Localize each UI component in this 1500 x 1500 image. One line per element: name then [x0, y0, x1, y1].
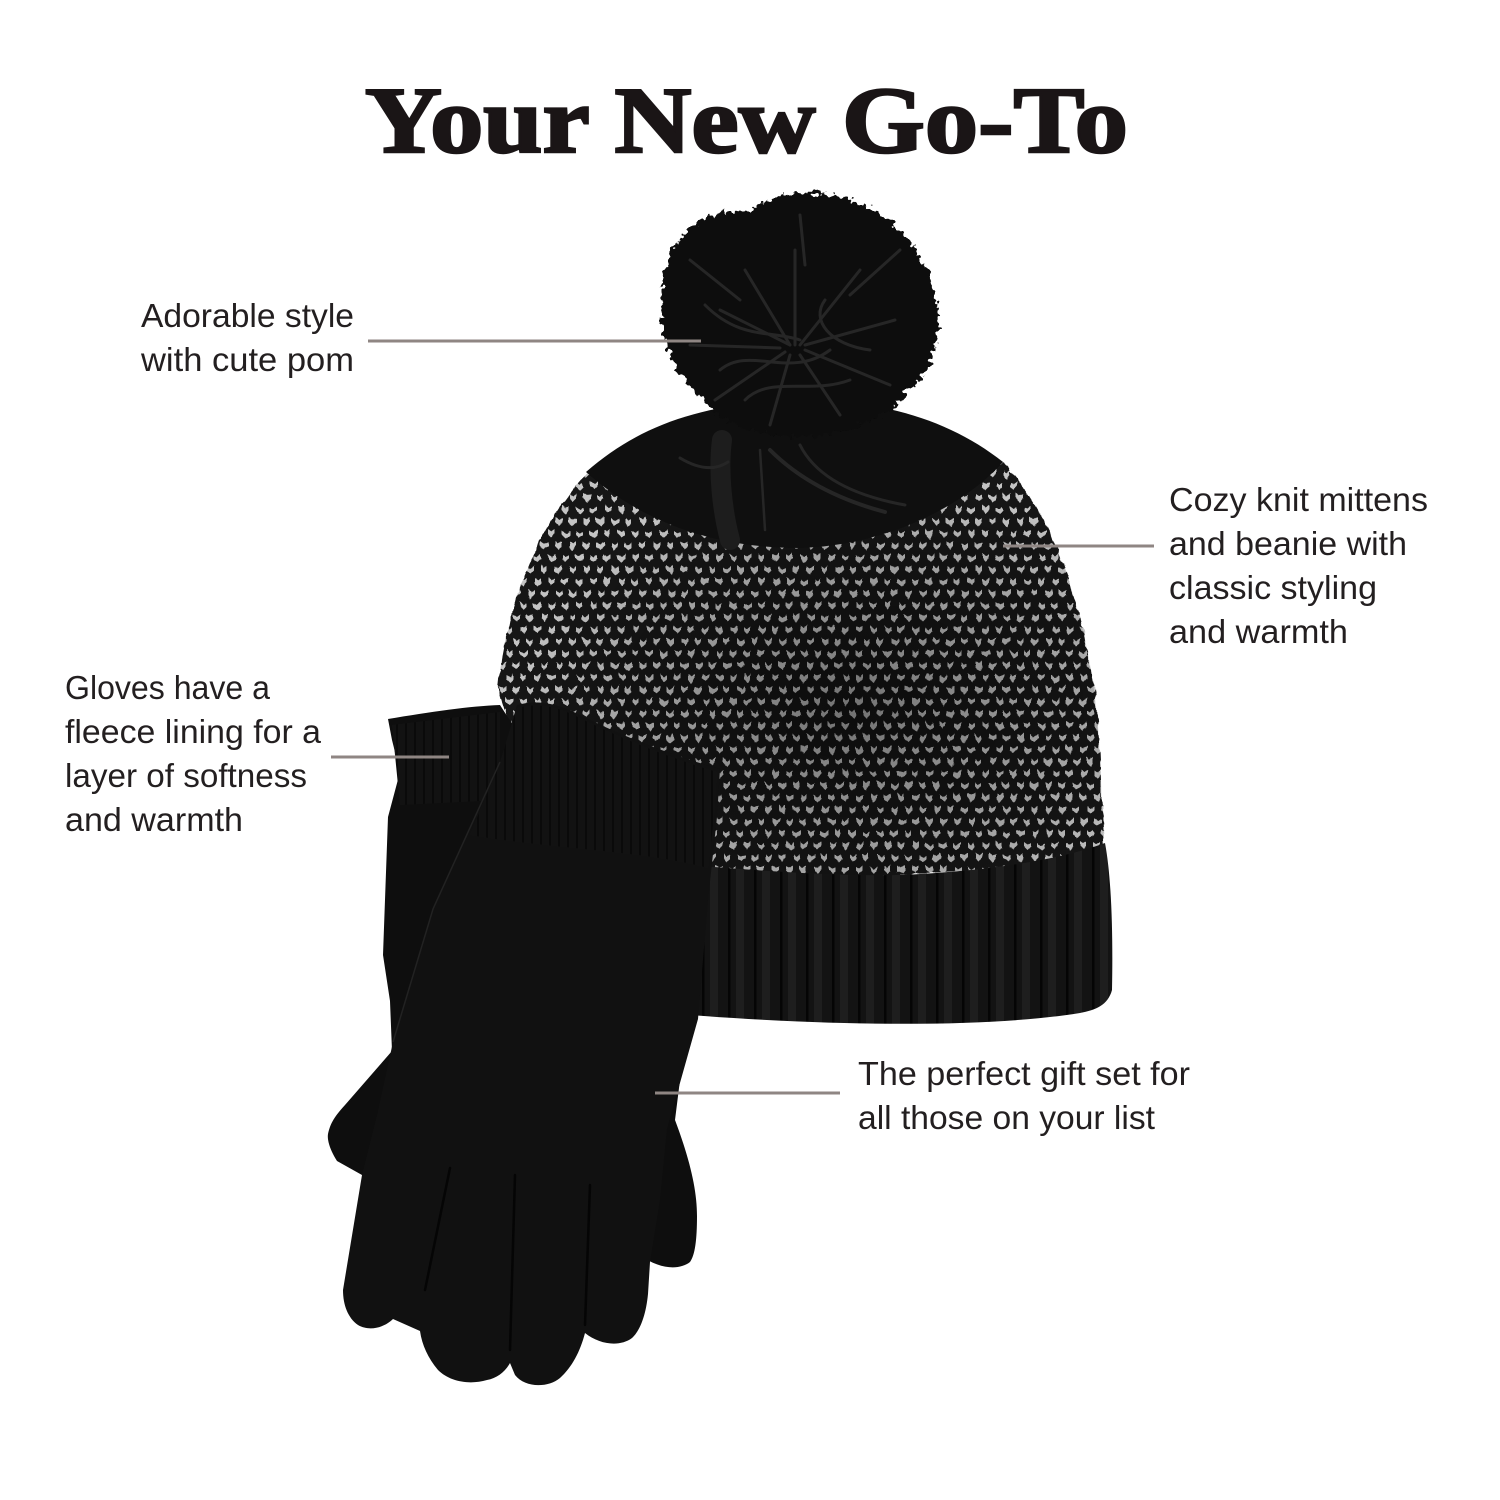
callout text: knit: and warmth	[1169, 613, 1348, 650]
leader line: knit	[1003, 544, 1154, 548]
beanie patterned body	[498, 460, 1105, 890]
callout text: knit: classic styling	[1169, 569, 1377, 606]
beanie crown ties	[680, 440, 905, 540]
product: gloves	[328, 702, 720, 1385]
callout text: pom: Adorable style	[141, 297, 354, 334]
leader line: pom	[368, 340, 701, 342]
beanie black crown band	[586, 400, 1003, 548]
callout: gift set	[655, 1055, 1190, 1136]
leader line: gift set	[655, 1092, 840, 1094]
callout text: fleece lining: layer of softness	[65, 757, 307, 794]
beanie ribbed cuff	[690, 843, 1112, 1024]
callout text: gift set: The perfect gift set for	[858, 1055, 1190, 1092]
callout text: knit: and beanie with	[1169, 525, 1407, 562]
callout text: fleece lining: and warmth	[65, 801, 243, 838]
callout text: knit: Cozy knit mittens	[1169, 481, 1428, 518]
front glove	[343, 702, 720, 1385]
callout: pom	[140, 297, 701, 378]
leader line: fleece lining	[331, 756, 449, 758]
callout text: fleece lining: Gloves have a	[65, 669, 271, 706]
title: Your New Go-To	[365, 69, 1128, 173]
callout: knit	[1003, 481, 1428, 650]
pom-pom	[661, 193, 939, 436]
callout: fleece lining	[65, 669, 449, 838]
product: beanie with pom	[498, 193, 1112, 1024]
callout text: fleece lining: fleece lining for a	[65, 713, 322, 750]
callout text: pom: with cute pom	[140, 341, 354, 378]
back glove	[328, 705, 697, 1267]
callout text: gift set: all those on your list	[858, 1099, 1155, 1136]
